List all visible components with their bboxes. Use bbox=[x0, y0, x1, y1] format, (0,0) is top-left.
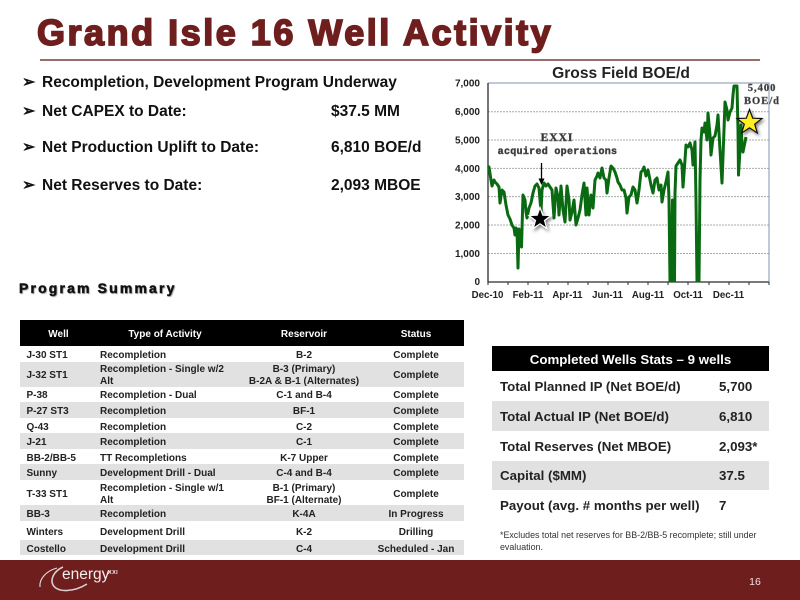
callout: 5,400 BOE/d bbox=[744, 83, 780, 107]
table: completed wells stats bbox=[492, 346, 769, 512]
stat: capital: 37.5 bbox=[719, 468, 745, 483]
stat: capital bbox=[492, 460, 769, 490]
table header: Reservoir bbox=[281, 329, 327, 340]
row: Winters: Drilling bbox=[399, 526, 433, 538]
x axis labels: Oct-11 bbox=[673, 290, 703, 301]
row: P-38: P-38 bbox=[26, 390, 48, 401]
row: J-21 bbox=[20, 433, 464, 449]
row: P-27 ST3: P-27 ST3 bbox=[26, 406, 69, 417]
bullet: program underway: Recompletion, Development Program Underway bbox=[42, 74, 397, 91]
y axis labels: 2,000 bbox=[455, 220, 480, 232]
row: Costello: C-4 bbox=[296, 544, 312, 554]
table header bbox=[20, 320, 464, 346]
icon: black star bbox=[529, 208, 551, 228]
bullet: net production uplift: Net Production Uplift to Date: bbox=[42, 139, 259, 156]
stat: reserves: 2,093* bbox=[719, 438, 757, 454]
row: J-21: C-1 bbox=[296, 437, 312, 448]
line chart: gross field BOE/d bbox=[455, 65, 780, 301]
row: J-32 ST1: Complete bbox=[393, 370, 439, 381]
title: Grand Isle 16 Well Activity bbox=[37, 12, 553, 53]
row: T-33 ST1: T-33 ST1 bbox=[26, 488, 68, 500]
row: Sunny: Complete bbox=[393, 468, 439, 479]
bullet: net reserves bbox=[22, 177, 421, 194]
row: P-38: Complete bbox=[393, 390, 439, 401]
callout: EXXI acquired operations bbox=[498, 132, 617, 158]
stat: planned IP: 5,700 bbox=[719, 379, 752, 394]
table header: Type of Activity bbox=[128, 329, 202, 340]
bullet: net capex: $37.5 MM bbox=[331, 103, 400, 120]
row: Q-43: C-2 bbox=[296, 422, 312, 432]
row: Q-43: Q-43 bbox=[26, 422, 49, 432]
row: J-30 ST1: Recompletion bbox=[100, 350, 166, 361]
stats header: Completed Wells Stats – 9 wells bbox=[530, 352, 731, 366]
row: J-30 ST1: Complete bbox=[393, 350, 439, 361]
row: J-21: Complete bbox=[393, 437, 439, 448]
row: J-32 ST1: Recompletion - Single w/2 Alt bbox=[100, 364, 224, 387]
bullet: net production uplift bbox=[22, 139, 421, 156]
logo: energy XXI: XXI bbox=[108, 570, 118, 576]
row: T-33 ST1: BF-1 (Alternate) bbox=[266, 494, 342, 506]
x axis labels: Aug-11 bbox=[632, 290, 665, 301]
row: P-38: Recompletion - Dual bbox=[100, 390, 197, 401]
chart title: Gross Field BOE/d bbox=[552, 65, 690, 82]
row: J-21: Recompletion bbox=[100, 437, 166, 448]
row: P-27 ST3 bbox=[20, 402, 464, 418]
bullet: net reserves: 2,093 MBOE bbox=[331, 177, 421, 194]
y axis labels: 1,000 bbox=[455, 249, 480, 260]
x axis labels: Dec-10 bbox=[472, 290, 503, 301]
row: Costello: Scheduled - Jan bbox=[378, 544, 454, 554]
row: J-30 ST1: B-2 bbox=[296, 350, 312, 361]
stat: actual IP: 6,810 bbox=[719, 409, 752, 424]
callout: 5,400 BOE/d: 5,400 bbox=[748, 83, 776, 94]
row: Winters: Development Drill bbox=[100, 526, 185, 538]
row: Costello: Development Drill bbox=[100, 544, 185, 554]
row: BB-2/BB-5: TT Recompletions bbox=[100, 452, 187, 464]
row: Q-43 bbox=[26, 422, 439, 432]
arrow: to acquisition date bbox=[538, 163, 544, 185]
row: BB-2/BB-5: BB-2/BB-5 bbox=[26, 452, 76, 464]
row: J-32 ST1: J-32 ST1 bbox=[26, 370, 68, 381]
logo: energy XXI: energy bbox=[62, 566, 110, 583]
bullet: net reserves: ➢ bbox=[22, 177, 35, 194]
row: Q-43: Recompletion bbox=[100, 422, 166, 432]
row: P-38: C-1 and B-4 bbox=[276, 390, 332, 401]
stat: reserves: Total Reserves (Net MBOE) bbox=[500, 438, 671, 454]
row: P-27 ST3: Recompletion bbox=[100, 406, 166, 417]
x axis labels: Jun-11 bbox=[592, 290, 623, 301]
row: Sunny: Sunny bbox=[26, 468, 57, 479]
table header: Status bbox=[401, 329, 431, 340]
row: Costello: Costello bbox=[26, 544, 66, 554]
row: BB-3: In Progress bbox=[388, 509, 444, 520]
bullet: net production uplift: 6,810 BOE/d bbox=[331, 139, 421, 156]
stat: payout: Payout (avg. # months per well) bbox=[500, 498, 700, 512]
row: Winters: K-2 bbox=[296, 526, 312, 538]
x axis labels bbox=[472, 290, 745, 301]
stat: actual IP bbox=[492, 401, 769, 430]
row: T-33 ST1 bbox=[26, 482, 439, 506]
row: T-33 ST1: B-1 (Primary) bbox=[273, 482, 335, 494]
y axis labels: 3,000 bbox=[455, 192, 480, 203]
row: BB-3: Recompletion bbox=[100, 509, 166, 520]
heading: program summary: Program Summary bbox=[19, 280, 177, 296]
row: J-32 ST1: B-3 (Primary) bbox=[273, 364, 335, 375]
stat: reserves bbox=[500, 438, 758, 454]
bullet: net capex: Net CAPEX to Date: bbox=[42, 103, 187, 120]
row: P-38 bbox=[26, 390, 439, 401]
row: Sunny: C-4 and B-4 bbox=[276, 468, 332, 479]
row: Q-43: Complete bbox=[393, 422, 439, 432]
footer band bbox=[0, 560, 800, 600]
bullet: program underway: ➢ bbox=[22, 74, 35, 91]
x axis labels: Dec-11 bbox=[713, 290, 745, 301]
row: BB-2/BB-5: Complete bbox=[393, 452, 439, 464]
stats header bbox=[492, 346, 769, 371]
row: Costello bbox=[20, 540, 464, 555]
row: J-32 ST1 bbox=[20, 362, 464, 386]
x axis labels: Feb-11 bbox=[513, 290, 544, 301]
stat: planned IP: Total Planned IP (Net BOE/d) bbox=[500, 379, 681, 394]
table header: Well bbox=[48, 329, 69, 340]
bullet: net capex: ➢ bbox=[22, 103, 35, 120]
row: J-30 ST1: J-30 ST1 bbox=[26, 350, 68, 361]
stat: capital: Capital ($MM) bbox=[500, 468, 586, 483]
y axis labels: 7,000 bbox=[455, 78, 480, 90]
footnote: *Excludes total net reserves for BB-2/BB-5 recomplete; still under evaluation. bbox=[500, 530, 757, 552]
row: J-32 ST1: B-2A & B-1 (Alternates) bbox=[249, 376, 359, 387]
bullet: net reserves: Net Reserves to Date: bbox=[42, 177, 202, 194]
row: BB-2/BB-5 bbox=[26, 452, 439, 464]
row: BB-3: BB-3 bbox=[26, 509, 50, 520]
x axis labels: Apr-11 bbox=[552, 290, 583, 301]
y axis labels: 0 bbox=[474, 277, 480, 288]
stat: actual IP: Total Actual IP (Net BOE/d) bbox=[500, 409, 669, 424]
bullet: net production uplift: ➢ bbox=[22, 139, 35, 156]
row: BB-2/BB-5: K-7 Upper bbox=[280, 452, 328, 464]
production line bbox=[488, 86, 746, 281]
row: BB-3: K-4A bbox=[292, 509, 316, 520]
row: T-33 ST1: Recompletion - Single w/1 Alt bbox=[100, 482, 224, 506]
row: Winters bbox=[26, 526, 433, 538]
stat: payout: 7 bbox=[719, 498, 726, 512]
y axis labels bbox=[455, 78, 480, 288]
row: Winters: Winters bbox=[26, 526, 63, 538]
row: BB-3 bbox=[20, 505, 464, 521]
row: P-27 ST3: Complete bbox=[393, 406, 439, 417]
bullet: net capex bbox=[22, 103, 400, 120]
y axis labels: 6,000 bbox=[455, 107, 480, 118]
row: J-21: J-21 bbox=[26, 437, 47, 448]
row: Sunny bbox=[20, 464, 464, 480]
row: T-33 ST1: Complete bbox=[393, 488, 439, 500]
table: program summary bbox=[20, 320, 464, 555]
row: P-27 ST3: BF-1 bbox=[293, 406, 315, 417]
callout: 5,400 BOE/d: BOE/d bbox=[744, 96, 780, 107]
y axis labels: 5,000 bbox=[455, 136, 480, 146]
icon: yellow star bbox=[737, 110, 762, 133]
row: Sunny: Development Drill - Dual bbox=[100, 468, 216, 479]
logo: energy XXI bbox=[39, 566, 118, 592]
row: J-30 ST1 bbox=[26, 350, 439, 361]
y axis labels: 4,000 bbox=[455, 164, 480, 175]
callout: EXXI acquired operations: EXXI bbox=[541, 132, 573, 144]
page number: 16 bbox=[749, 576, 761, 588]
callout: EXXI acquired operations: acquired operations bbox=[498, 146, 617, 158]
